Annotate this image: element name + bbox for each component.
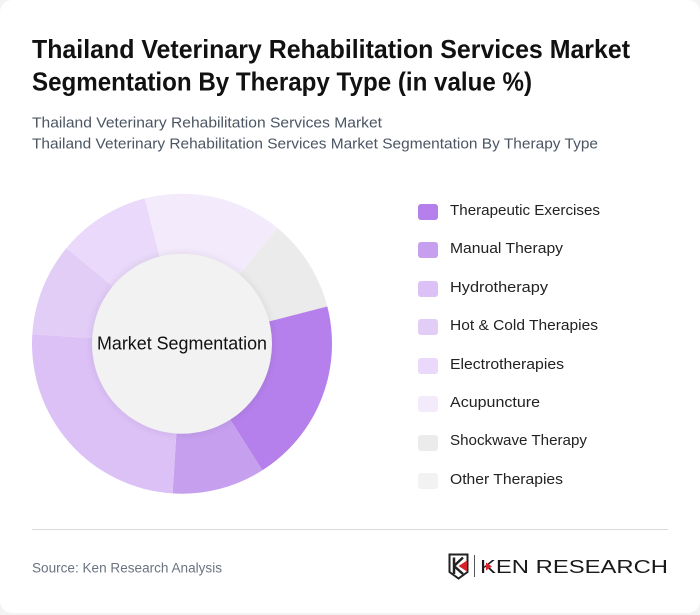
legend item: Manual Therapy: Manual Therapy	[450, 240, 564, 257]
center label: Market Segmentation	[97, 334, 267, 354]
segment: Acupuncture	[145, 194, 278, 344]
segment: Manual Therapy	[173, 344, 262, 494]
legend item: Hydrotherapy	[418, 279, 549, 297]
legend item: Other Therapies: Other Therapies	[450, 471, 563, 488]
segment: Electrotherapies	[66, 198, 182, 344]
legend item: Shockwave Therapy: Shockwave Therapy	[450, 432, 587, 449]
legend item: Acupuncture	[418, 394, 540, 412]
legend item: Hot & Cold Therapies: Hot & Cold Therapies	[450, 317, 598, 334]
source note: Source: Ken Research Analysis	[32, 560, 222, 576]
logo wordmark: KEN RESEARCH	[480, 557, 668, 577]
center circle	[92, 254, 272, 434]
title: Segmentation By Therapy Type (in value %)	[32, 66, 532, 96]
legend item: Hydrotherapy: Hydrotherapy	[450, 279, 549, 296]
segment: Hydrotherapy	[32, 334, 182, 493]
legend item: Electrotherapies: Electrotherapies	[450, 356, 564, 373]
legend item: Acupuncture: Acupuncture	[450, 394, 540, 411]
segment: Hot & Cold Therapies	[32, 248, 182, 344]
subtitle	[32, 114, 598, 152]
title: Thailand Veterinary Rehabilitation Services Market	[32, 34, 630, 64]
subtitle: Thailand Veterinary Rehabilitation Services Market Segmentation By Therapy Type	[32, 136, 598, 152]
subtitle: Thailand Veterinary Rehabilitation Services Market	[32, 114, 383, 132]
icon: shield K	[450, 554, 468, 578]
legend item: Therapeutic Exercises: Therapeutic Exercises	[450, 202, 600, 219]
title	[32, 34, 630, 96]
legend	[418, 202, 600, 489]
donut chart	[32, 194, 332, 494]
segment: Shockwave Therapy	[182, 228, 327, 344]
segment: Therapeutic Exercises	[182, 306, 332, 470]
logo: Ken Research	[450, 554, 668, 578]
